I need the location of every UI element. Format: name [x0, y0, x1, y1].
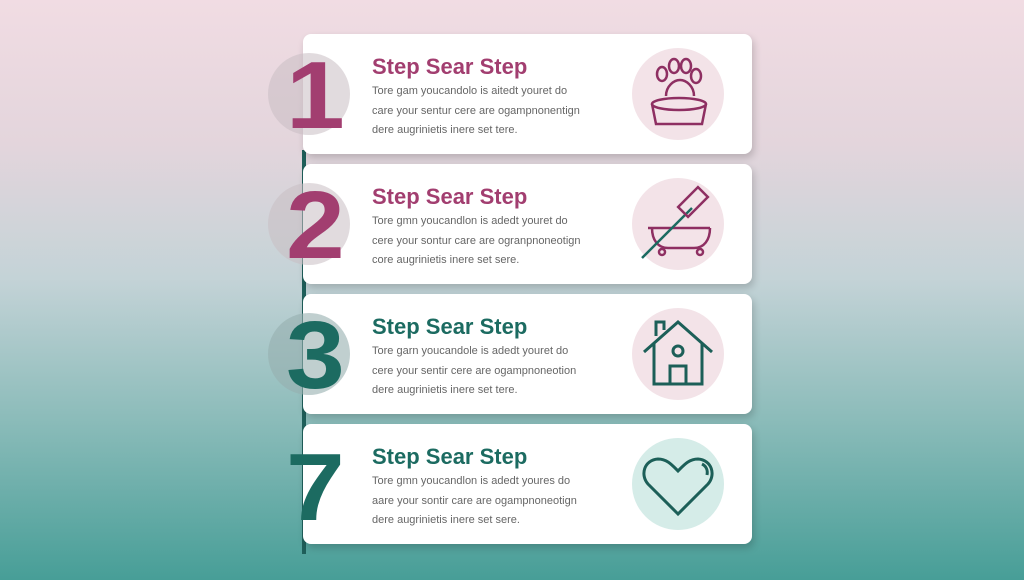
- text 3: dere augrinietis inere set tere.: [372, 384, 518, 396]
- text 4: [372, 475, 577, 526]
- text 3: [372, 345, 576, 396]
- text 4: aare your sontir care are ogampnoneotign: [372, 494, 577, 506]
- title 1: Step Sear Step: [372, 54, 527, 79]
- text 3: Tore garn youcandole is adedt youret do: [372, 345, 568, 357]
- title 4: Step Sear Step: [372, 444, 527, 469]
- text 1: [372, 85, 580, 136]
- text 4: dere augrinietis inere set sere.: [372, 514, 520, 526]
- number badges: [268, 42, 350, 541]
- text 1: dere augrinietis inere set tere.: [372, 124, 518, 136]
- number 1: 1: [286, 42, 340, 149]
- text 2: Tore gmn youcandlon is adedt youret do: [372, 215, 568, 227]
- text 2: [372, 215, 581, 266]
- icon: heart: [632, 438, 724, 530]
- card 2: [303, 164, 752, 284]
- text 4: Tore gmn youcandlon is adedt youres do: [372, 475, 570, 487]
- text 1: Tore gam youcandolo is aitedt youret do: [372, 85, 567, 97]
- card 3: [303, 294, 752, 414]
- number 3: 3: [286, 302, 340, 409]
- icon: paw bowl: [632, 48, 724, 140]
- text 2: cere your sontur care are ogranpnoneotign: [372, 234, 581, 246]
- icon: brush bath: [632, 178, 724, 270]
- text 1: care your sentur cere are ogampnonentign: [372, 104, 580, 116]
- icon: house: [632, 308, 724, 400]
- card 4: [303, 424, 752, 544]
- title 2: Step Sear Step: [372, 184, 527, 209]
- text 3: cere your sentir cere are ogampnoneotion: [372, 364, 576, 376]
- number 2: 2: [286, 172, 340, 279]
- text 2: core augrinietis inere set sere.: [372, 254, 519, 266]
- title 3: Step Sear Step: [372, 314, 527, 339]
- card 1: [303, 34, 752, 154]
- number 7: 7: [286, 434, 340, 541]
